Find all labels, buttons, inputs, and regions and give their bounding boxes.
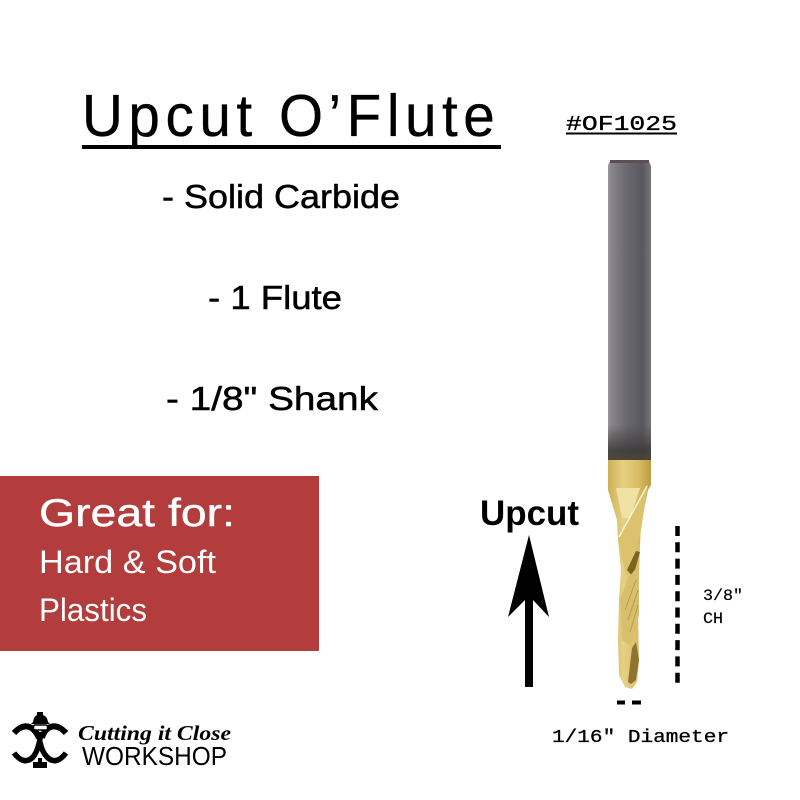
upcut arrow	[508, 535, 549, 687]
logo script text: Cutting it Close	[78, 721, 231, 745]
feature: shank size: - 1/8" Shank	[166, 380, 379, 417]
cutting height label: 3/8"	[703, 587, 743, 605]
shank	[608, 160, 651, 462]
cutting height label: CH	[703, 610, 723, 628]
gold cutting tip	[608, 460, 651, 689]
logo	[14, 712, 231, 771]
diameter label: 1/16" Diameter	[552, 728, 729, 748]
panel heading: Great for:	[39, 492, 235, 535]
panel text: materials line 1: Hard & Soft	[39, 544, 216, 580]
title: Upcut O’Flute	[82, 84, 495, 149]
upcut label: Upcut	[480, 494, 579, 533]
cutting height label	[703, 587, 743, 628]
panel: great for	[0, 476, 319, 651]
logo icon	[14, 712, 66, 768]
feature list	[162, 178, 400, 417]
panel text: materials line 2: Plastics	[39, 592, 147, 628]
feature: solid carbide: - Solid Carbide	[162, 178, 400, 215]
router bit image	[608, 160, 651, 689]
cutting height dashed line	[675, 526, 680, 683]
part number: #OF1025	[566, 114, 677, 137]
diameter marker	[617, 700, 641, 704]
feature: flute count: - 1 Flute	[208, 279, 342, 316]
logo workshop text: WORKSHOP	[82, 741, 227, 771]
